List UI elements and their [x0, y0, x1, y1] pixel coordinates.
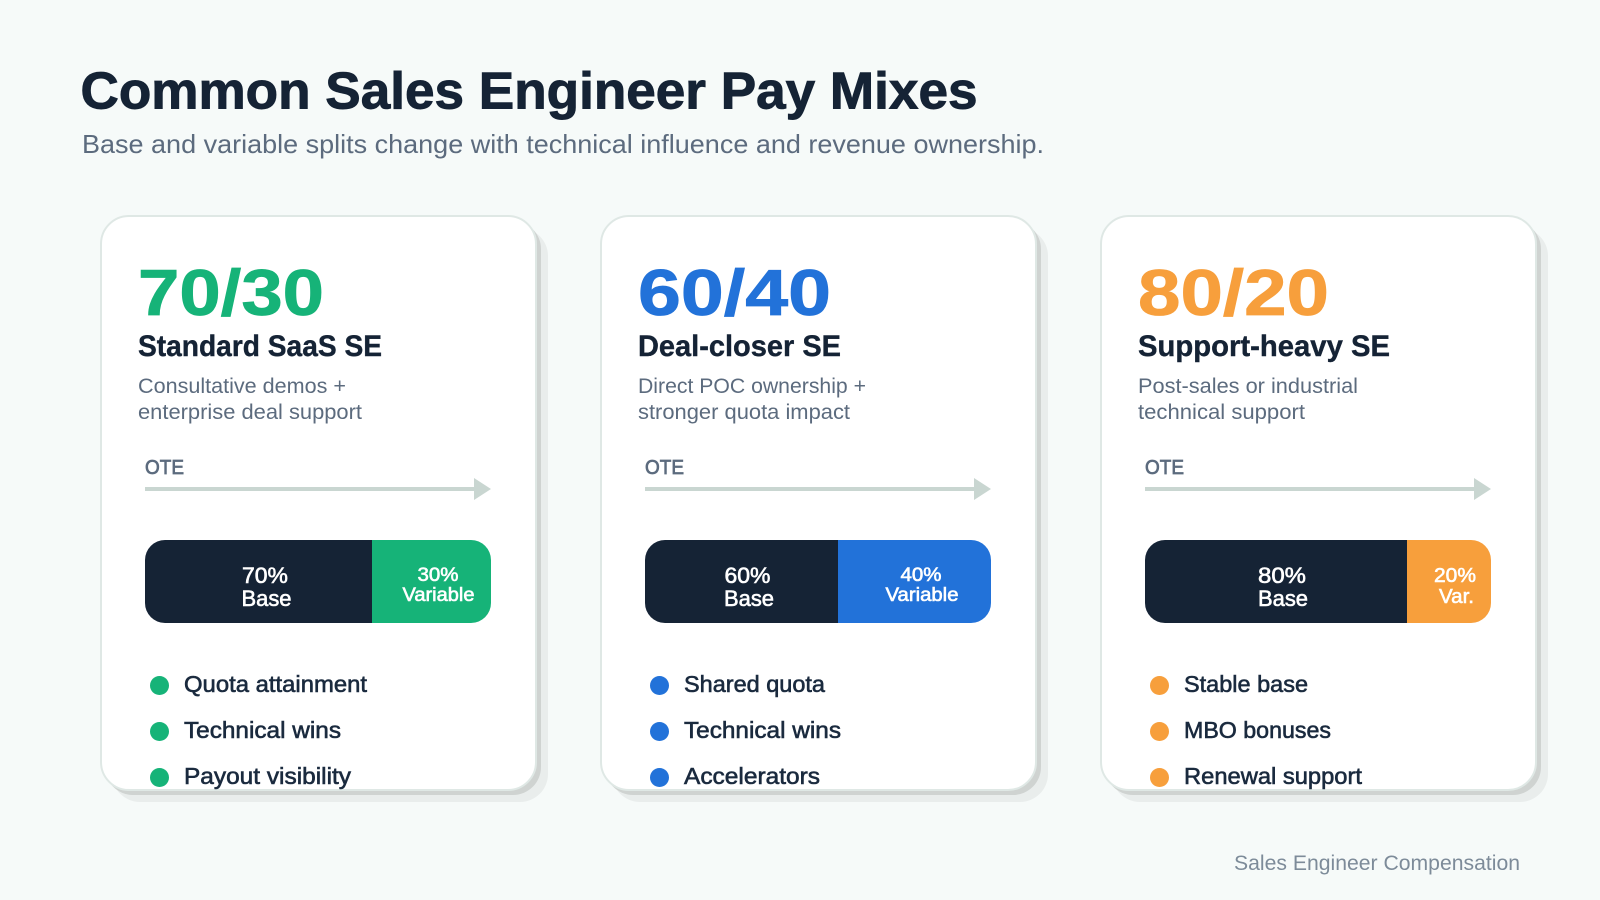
bullet list — [650, 671, 841, 789]
split bar: 70% — [242, 563, 288, 588]
OTE label: OTE — [645, 457, 684, 479]
description: technical support — [1138, 401, 1305, 424]
split bar — [145, 540, 491, 623]
split ratio: 60/40 — [638, 256, 831, 329]
bullet list: Quota attainment — [184, 671, 368, 697]
bullet list: MBO bonuses — [1184, 717, 1331, 743]
panel: support-heavy SE 80/20 — [1101, 216, 1548, 802]
role name: Deal-closer SE — [638, 330, 841, 363]
split bar: Base — [1258, 586, 1308, 611]
bullet list: Accelerators — [684, 763, 820, 789]
bullet list — [150, 671, 368, 789]
description: Post-sales or industrial — [1138, 375, 1358, 398]
panel: standard SaaS SE 70/30 — [101, 216, 548, 802]
title: Common Sales Engineer Pay Mixes — [80, 62, 978, 120]
description — [1138, 375, 1358, 424]
OTE arrow — [645, 478, 991, 500]
split bar: 20% — [1434, 565, 1476, 587]
bullet list: Technical wins — [684, 717, 841, 743]
panel: deal-closer SE 60/40 — [601, 216, 1048, 802]
split bar: 80% — [1258, 563, 1306, 588]
split bar: Var. — [1439, 586, 1474, 608]
split bar: 30% — [418, 565, 459, 586]
description — [138, 375, 362, 424]
OTE arrow — [1145, 478, 1491, 500]
description — [638, 375, 866, 424]
description: stronger quota impact — [638, 401, 850, 424]
split bar: Base — [242, 586, 292, 611]
bullet list: Shared quota — [684, 671, 825, 697]
split ratio: 70/30 — [138, 256, 324, 329]
bullet list: Renewal support — [1184, 763, 1363, 789]
footer label: Sales Engineer Compensation — [1234, 852, 1520, 875]
split bar — [645, 540, 991, 623]
OTE label: OTE — [145, 457, 184, 479]
bullet list: Stable base — [1184, 671, 1308, 697]
split ratio: 80/20 — [1138, 256, 1329, 329]
bullet list — [1150, 671, 1363, 789]
role name: Support-heavy SE — [1138, 330, 1390, 363]
bullet list: Payout visibility — [184, 763, 352, 789]
split bar: Variable — [886, 585, 958, 606]
subtitle: Base and variable splits change with technical influence and revenue ownership. — [82, 129, 1044, 159]
split bar — [1145, 540, 1491, 623]
description: Consultative demos + — [138, 375, 346, 398]
description: enterprise deal support — [138, 401, 362, 424]
split bar: Base — [724, 586, 774, 611]
role name: Standard SaaS SE — [138, 330, 382, 363]
OTE arrow — [145, 478, 491, 500]
split bar: Variable — [402, 585, 474, 606]
split bar: 60% — [724, 563, 770, 588]
split bar: 40% — [900, 565, 942, 586]
OTE label: OTE — [1145, 457, 1184, 479]
bullet list: Technical wins — [184, 717, 341, 743]
description: Direct POC ownership + — [638, 375, 866, 398]
